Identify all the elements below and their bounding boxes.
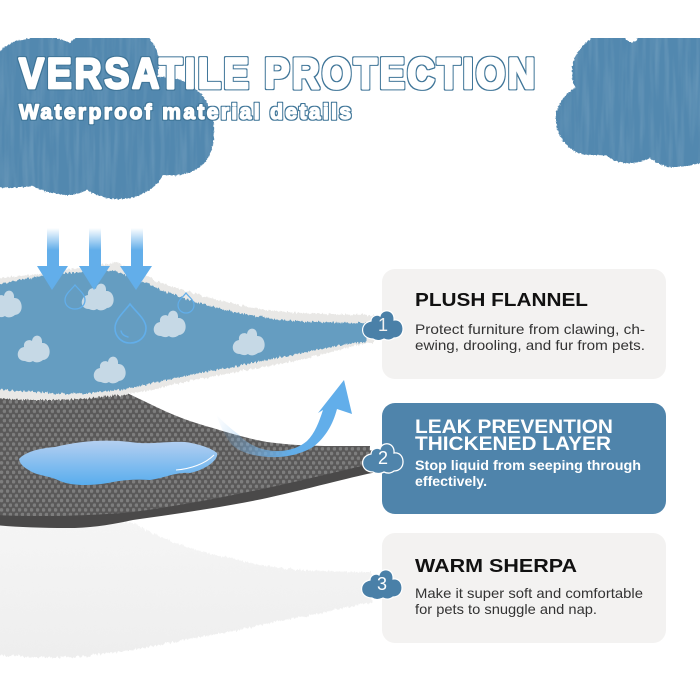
panel: plush flannel card [382, 269, 666, 379]
text: leak prevention description [415, 457, 641, 489]
heading: leak prevention thickened layer [415, 417, 613, 455]
heading: leak prevention thickened layer: LEAK PREVENTION [415, 417, 613, 438]
flannel cloud pattern [0, 284, 265, 383]
text: warm sherpa description: for pets to snuggle and nap. [415, 601, 597, 617]
arrow: down 2 [79, 228, 110, 290]
badge: number 3: 3 [377, 574, 387, 594]
text: warm sherpa description [415, 585, 643, 617]
arrow: down 3 [120, 228, 152, 290]
text: plush flannel description: Protect furniture from clawing, ch- [415, 321, 645, 337]
layer: plush flannel [0, 262, 375, 400]
badge: number 1: 1 [378, 315, 388, 335]
text: leak prevention description: effectively. [415, 473, 487, 489]
heading: leak prevention thickened layer: THICKENED LAYER [415, 434, 611, 455]
heading: plush flannel: PLUSH FLANNEL [415, 289, 588, 310]
panel: warm sherpa card [382, 533, 666, 643]
subtitle: Waterproof material details [19, 101, 351, 124]
layer: waterproof mesh [0, 393, 377, 528]
badge: number 2: 2 [378, 448, 388, 468]
background cloud: top right [556, 34, 700, 167]
badge: number 1 [363, 311, 403, 340]
text: plush flannel description [415, 321, 645, 353]
arrow: down 1 [37, 228, 68, 290]
text: plush flannel description: ewing, drooling, and fur from pets. [415, 337, 645, 353]
puddle [19, 441, 217, 485]
panel: leak prevention card [382, 403, 666, 514]
arrow: swoosh up [216, 380, 352, 457]
text: warm sherpa description: Make it super soft and comfortable [415, 585, 643, 601]
badge: number 2 [363, 444, 403, 474]
heading: warm sherpa: WARM SHERPA [415, 555, 577, 576]
title: VERSATILE PROTECTION [19, 51, 535, 98]
text: leak prevention description: Stop liquid from seeping through [415, 457, 641, 473]
badge: number 3 [362, 570, 402, 600]
layer: warm sherpa [0, 522, 372, 657]
droplets [65, 285, 194, 343]
background cloud: top left [0, 34, 214, 199]
